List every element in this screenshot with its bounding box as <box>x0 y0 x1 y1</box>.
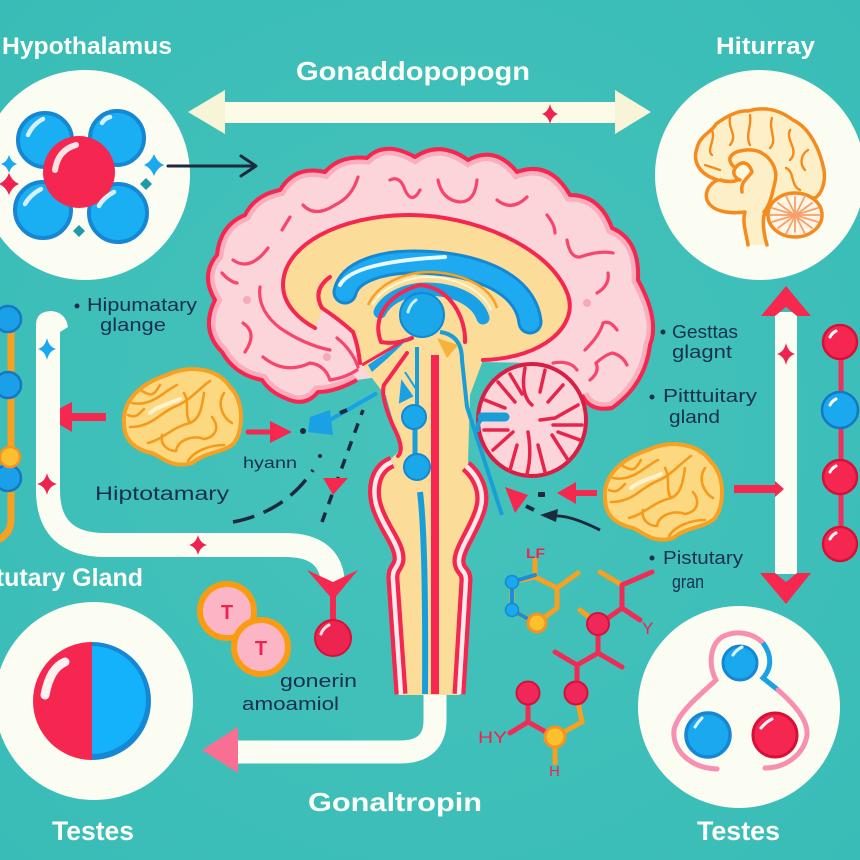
icon: left yellow brain <box>124 369 241 465</box>
arrow: bottom white curved arrow <box>202 695 435 773</box>
arrow: top double-headed <box>188 90 651 134</box>
chart: chemical structure molecules <box>478 545 653 780</box>
label: Gesttas glagnt <box>660 322 738 362</box>
arrow: right red arrow and black arrow <box>503 482 600 530</box>
label: Pistutary gran: Pistutary <box>663 548 743 568</box>
panel: top-left hypothalamus circle <box>0 70 190 280</box>
arrow: left red arrow to hypothalamus side <box>45 402 106 432</box>
label: Pistutary gran: gran <box>672 572 704 592</box>
label: Hipumatary glange: Hipumatary <box>87 295 197 315</box>
label: Gesttas glagnt: Gesttas <box>672 322 738 342</box>
heading: Gonaltropin: Gonaltropin <box>308 787 482 817</box>
chart: chemical structure molecules: LF <box>526 545 545 561</box>
label: Pittuitary gland <box>650 386 757 427</box>
chain: right molecule chain <box>822 325 858 561</box>
arrow: left white curved path <box>36 311 358 656</box>
label: Pistutary gran <box>650 548 743 592</box>
yellow inner arch <box>283 215 570 395</box>
icon: T hormone circles: T <box>255 638 267 660</box>
icon: T hormone circles: T <box>221 602 233 624</box>
arrow: right vertical double-headed <box>734 286 811 604</box>
label: Pittuitary gland: Pitttuitary <box>663 386 757 406</box>
icon: half red half blue ball <box>33 642 151 760</box>
red loop around pituitary <box>378 285 465 343</box>
arrow: red arrow to blue triangle <box>248 393 377 443</box>
chart: chemical structure molecules: HY <box>478 728 507 747</box>
icon: cerebellum <box>478 364 586 476</box>
label: gonerin amoamiol <box>242 671 357 714</box>
icon: right yellow brain <box>605 444 722 540</box>
chain: left molecule chain <box>0 306 21 542</box>
arrow: black pointer <box>168 156 256 176</box>
label: Hipumatary glange: glange <box>100 315 166 335</box>
brain folds <box>222 177 627 380</box>
blue ventricle <box>345 262 530 322</box>
blue pituitary ball <box>400 293 444 337</box>
panel: bottom-left circle <box>0 602 193 800</box>
chart: chemical structure molecules: Y <box>642 619 653 638</box>
label: Hipumatary glange <box>74 295 197 335</box>
icon: testes outline <box>674 633 807 769</box>
icon: blue and red molecule cluster <box>0 111 164 242</box>
label: Hyann: hyann <box>243 455 297 472</box>
icon: T hormone circles <box>200 584 288 674</box>
heading: Testes left: Testes <box>52 816 134 846</box>
brainstem <box>373 392 484 695</box>
heading: Testes right: Testes <box>697 816 780 846</box>
icon: orange brain <box>696 109 824 245</box>
heading: Hiturray: Hiturray <box>716 33 816 60</box>
icon: main brain cross-section <box>208 149 653 695</box>
arrow: dashed curves on left <box>233 410 363 522</box>
label: Pittuitary gland: gland <box>669 407 720 427</box>
panel: bottom-right testes circle <box>638 606 840 808</box>
chart: chemical structure molecules: H <box>549 763 560 780</box>
label: gonerin amoamiol: gonerin <box>280 671 357 691</box>
label: Gesttas glagnt: glagnt <box>672 342 732 362</box>
label: gonerin amoamiol: amoamiol <box>242 694 339 714</box>
panel: top-right brain circle <box>655 70 860 280</box>
heading: Gonaddopopogn: Gonaddopopogn <box>296 56 530 86</box>
heading: Hypothalamus: Hypothalamus <box>2 33 172 60</box>
label: Hiptotamary: Hiptotamary <box>95 484 230 505</box>
